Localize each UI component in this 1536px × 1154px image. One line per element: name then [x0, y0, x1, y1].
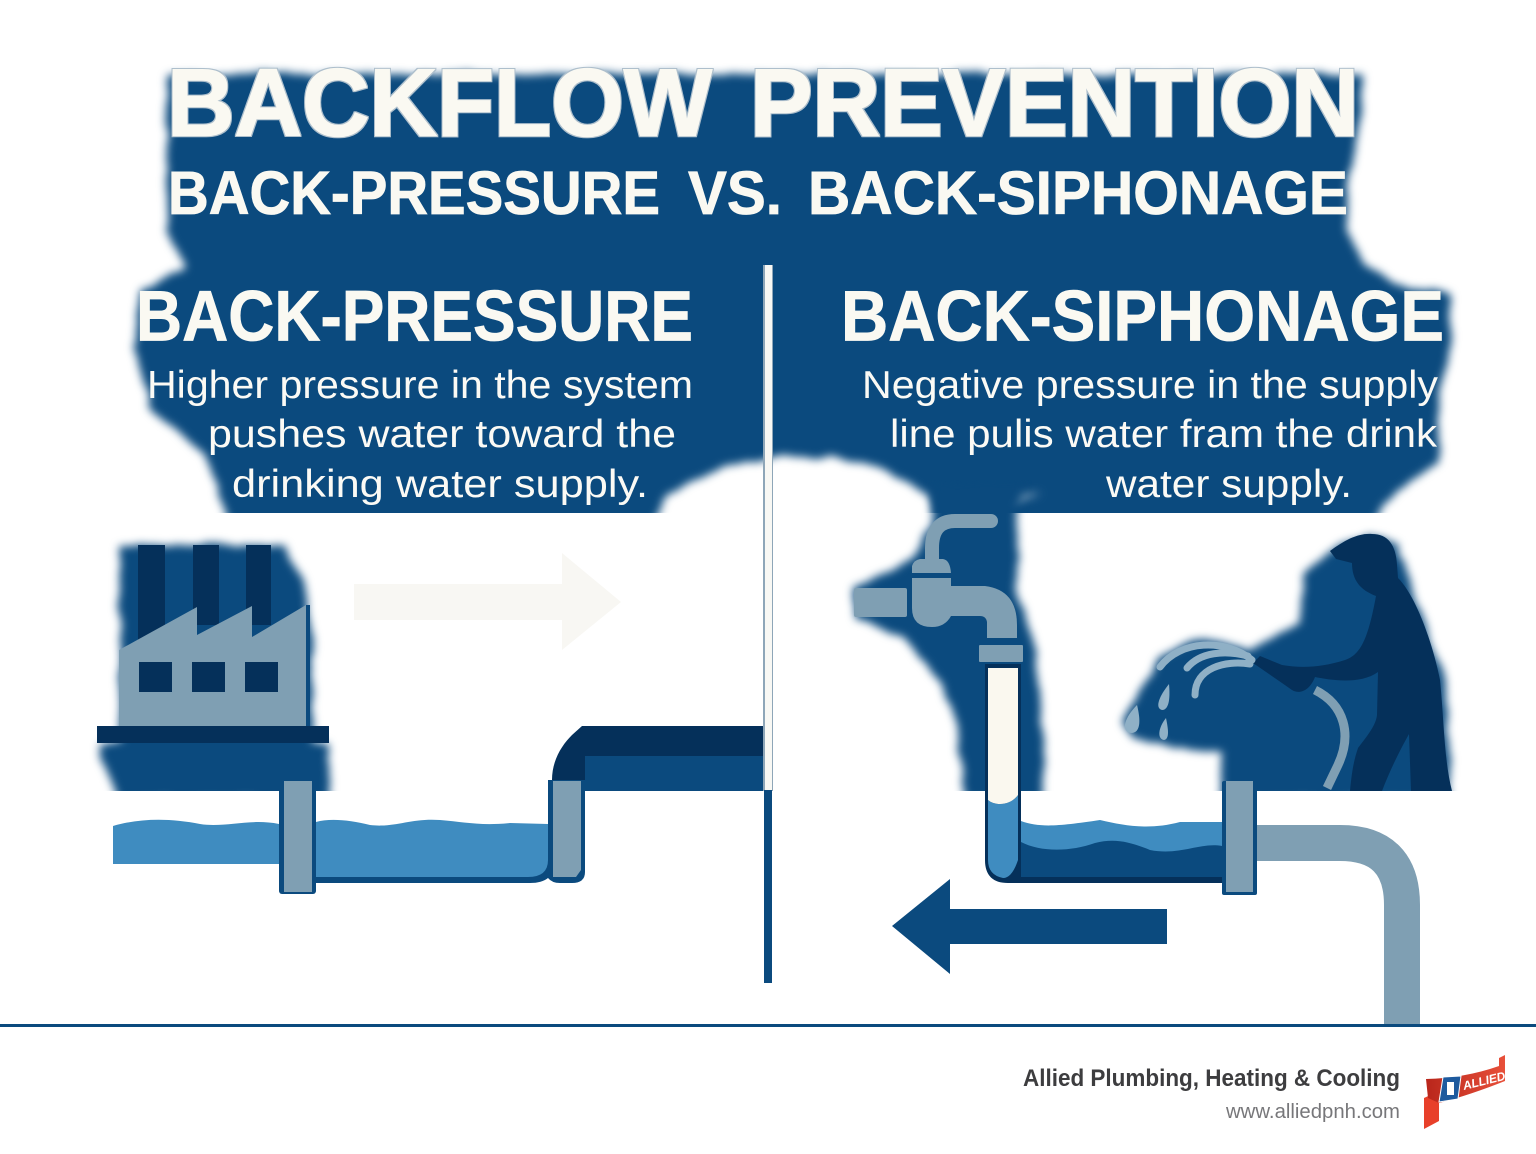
title: PREVENTION: [750, 50, 1359, 156]
back-siphonage pipe with water: [985, 664, 1402, 1025]
back-pressure pipe with water: [113, 726, 763, 894]
heading: back-siphonage: BACK-SIPHONAGE: [841, 278, 1444, 356]
panel: blue brush background: [102, 74, 1452, 800]
footer: website: www.alliedpnh.com: [1225, 1101, 1400, 1123]
text block: back-pressure description: pushes water toward the: [208, 413, 676, 456]
subtitle: VS.: [688, 159, 782, 227]
title: [167, 50, 1359, 156]
title: BACKFLOW: [167, 50, 712, 156]
text block: back-siphonage description: water supply.: [1105, 463, 1352, 506]
text block: back-pressure description: Higher pressure in the system: [147, 364, 693, 407]
text block: back-siphonage description: [862, 364, 1439, 506]
icon: Allied ribbon logo: [1424, 1055, 1507, 1129]
arrow: back-siphonage flow: [892, 879, 1167, 974]
footer rule: [0, 1024, 1536, 1027]
footer: company name: Allied Plumbing, Heating & Cooling: [1023, 1065, 1400, 1092]
icon: factory: [97, 545, 329, 743]
subtitle: BACK-PRESSURE: [168, 159, 660, 227]
arrow: pale pressure arrow: [354, 553, 621, 650]
icon: Allied ribbon logo: ALLIED: [1460, 1069, 1507, 1093]
text block: back-pressure description: [147, 364, 693, 506]
subtitle: BACK-SIPHONAGE: [808, 159, 1348, 227]
text block: back-siphonage description: Negative pressure in the supply: [862, 364, 1439, 407]
text block: back-pressure description: drinking water supply.: [232, 463, 648, 506]
text block: back-siphonage description: line pulis water fram the drink: [890, 413, 1438, 456]
subtitle: [168, 159, 1348, 227]
heading: back-pressure: BACK-PRESSURE: [136, 278, 693, 356]
icon: faucet: [854, 521, 1023, 662]
center divider: [763, 265, 773, 983]
icon: person with hose: [1125, 534, 1452, 791]
